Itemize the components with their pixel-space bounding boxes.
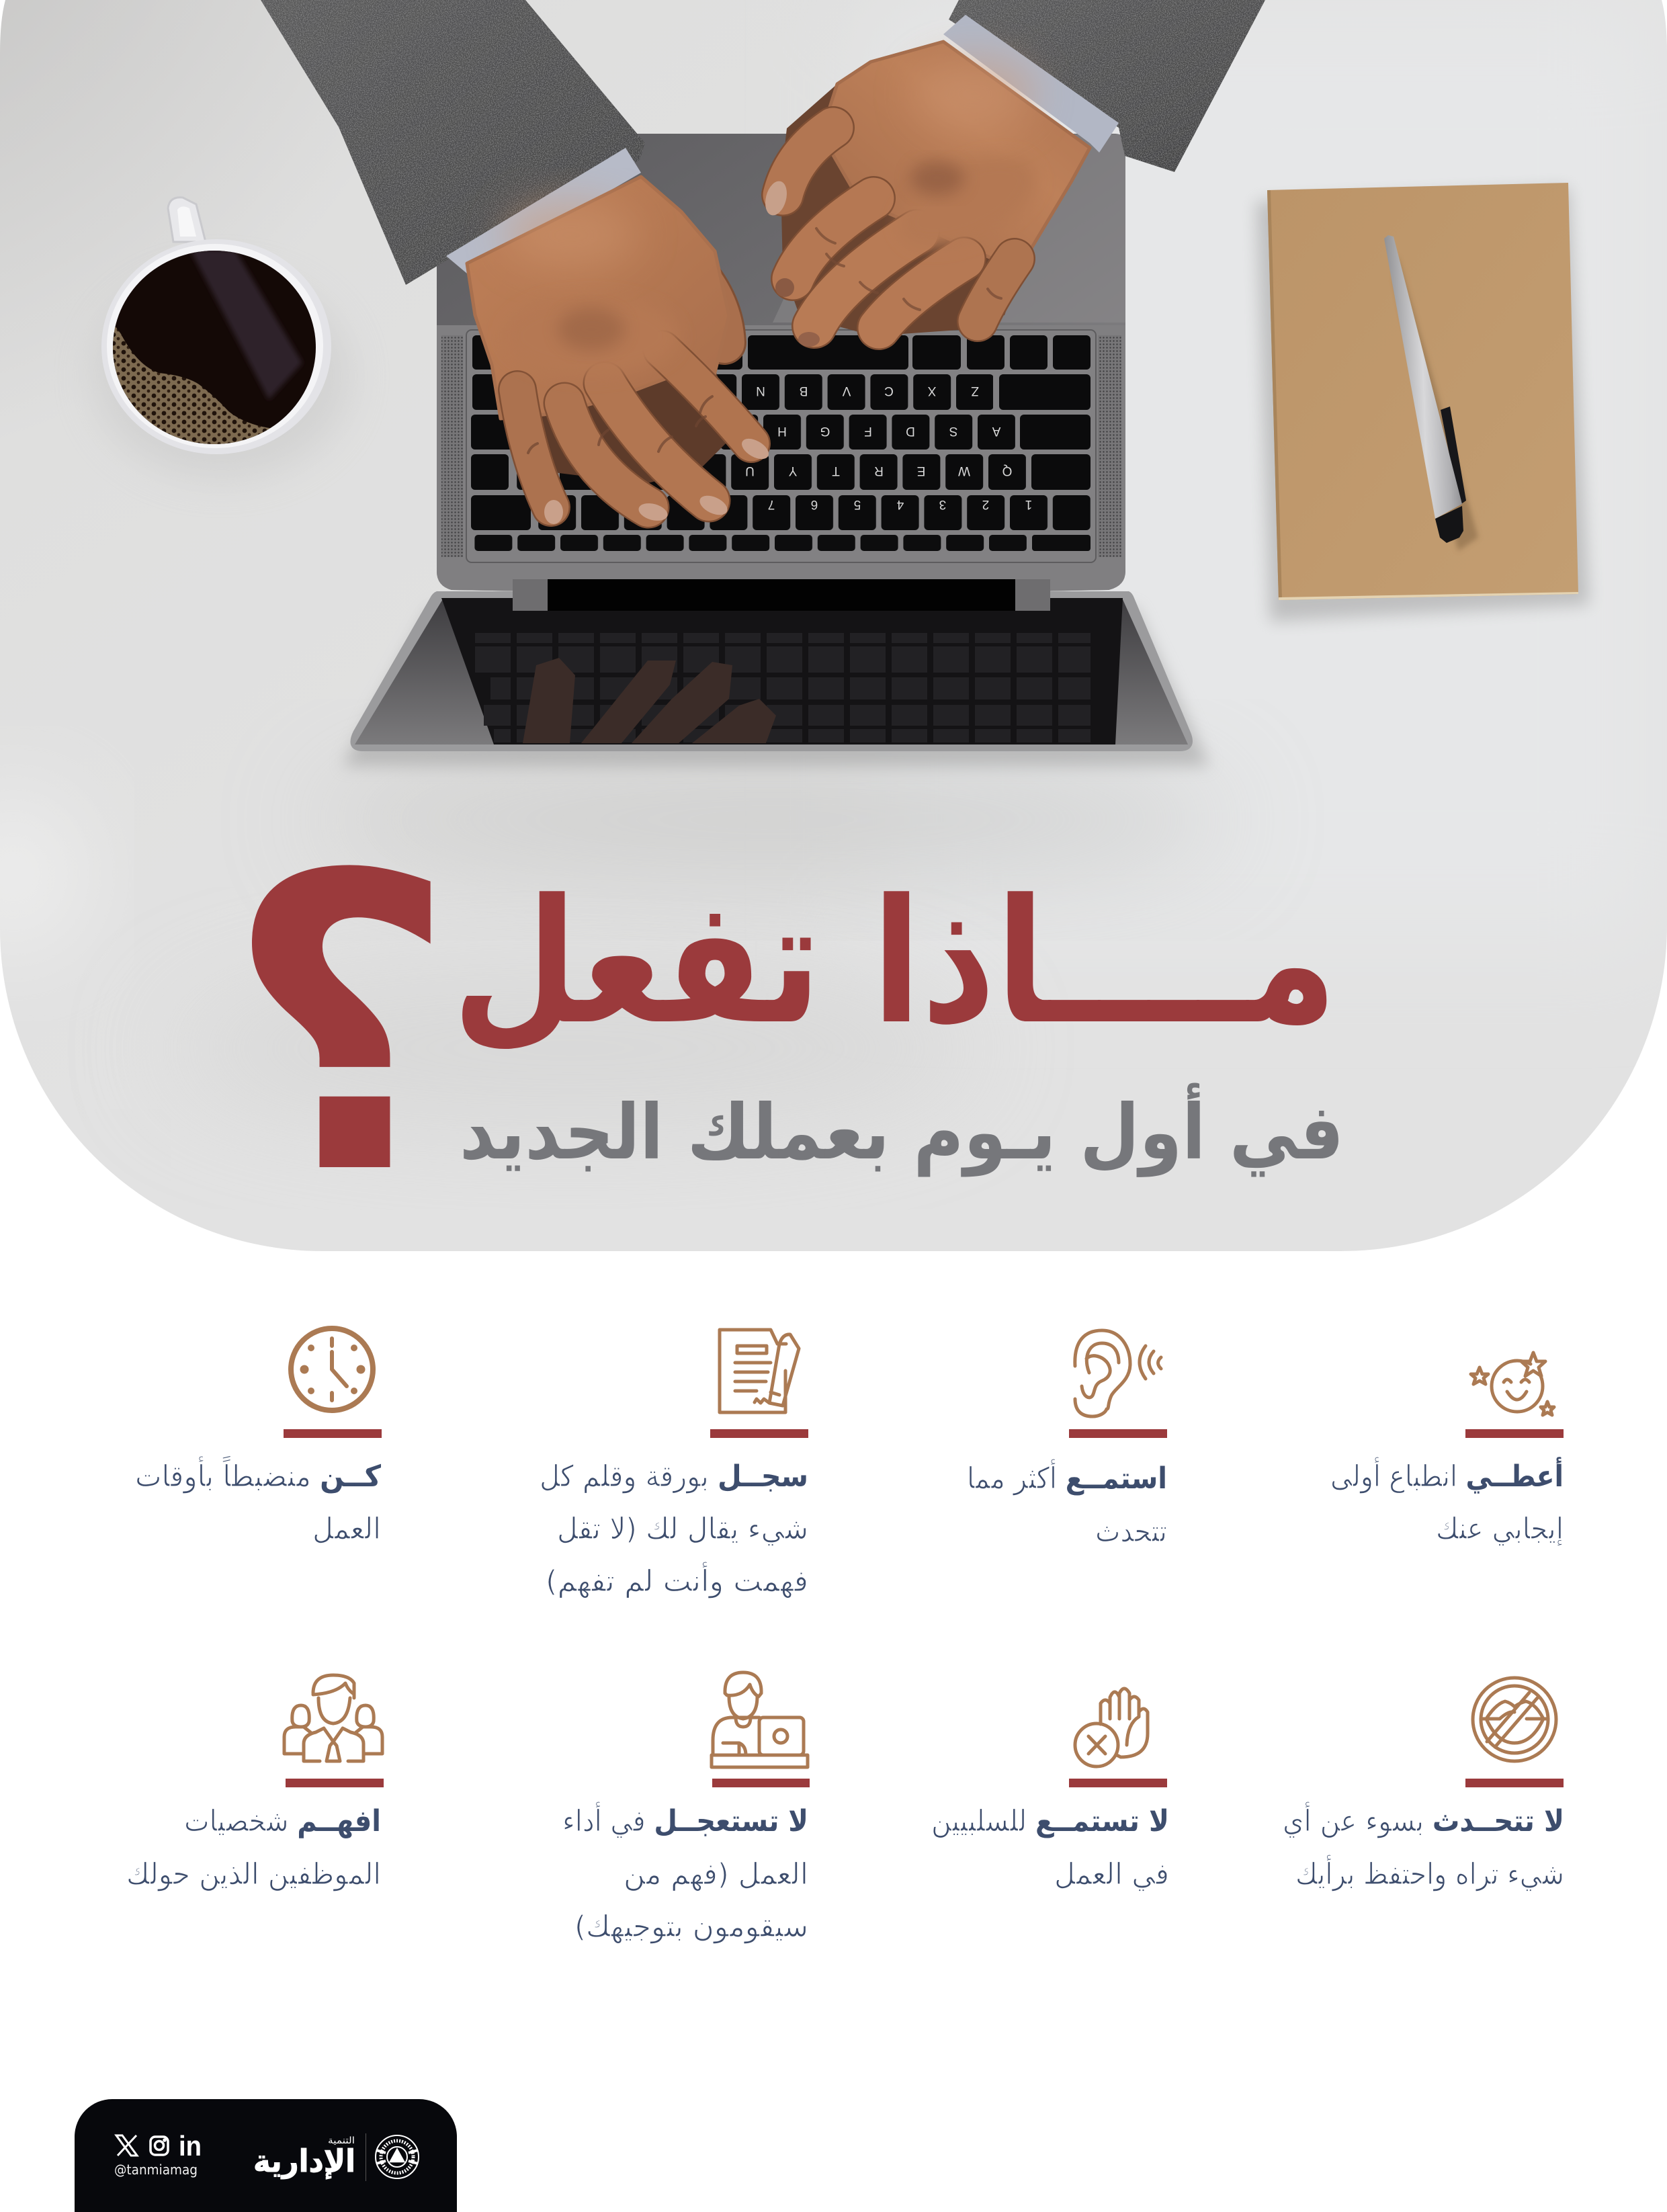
keyboard: V xyxy=(842,384,851,398)
keyboard: D xyxy=(906,424,915,438)
keyboard: Q xyxy=(1002,464,1012,478)
icon: stop hand with x xyxy=(1075,1689,1148,1767)
tip: understand colleagues: الموظفين الذين حولك xyxy=(126,1857,381,1891)
right hand xyxy=(762,42,1090,347)
icon: LinkedIn: in xyxy=(179,2130,202,2162)
keyboard: S xyxy=(949,424,957,438)
icon: Instagram xyxy=(151,2137,168,2155)
tip: do not rush xyxy=(562,1672,810,1944)
tip: first impression: أعطــي انطباع أولى xyxy=(1330,1457,1564,1494)
icon: X xyxy=(116,2135,137,2156)
tip: be punctual: كــن منضبطاً بأوقات xyxy=(135,1455,381,1494)
keyboard xyxy=(466,330,1096,562)
keyboard: W xyxy=(958,464,970,478)
keyboard: G xyxy=(820,424,830,438)
question mark: ؟ xyxy=(224,790,456,1263)
keyboard: C xyxy=(884,384,894,398)
tip: take notes: شيء يقال لك (لا تقل xyxy=(557,1512,808,1546)
footer badge xyxy=(75,2099,457,2212)
tip: do not listen to negative people: في العمل xyxy=(1054,1857,1169,1891)
logo wordmark: التنمية xyxy=(328,2135,355,2146)
keyboard: 1 xyxy=(1025,497,1032,511)
icon: smiling face with stars xyxy=(1471,1353,1554,1415)
icon: person at laptop xyxy=(712,1672,808,1767)
tip: understand colleagues xyxy=(126,1675,384,1891)
tip: understand colleagues: افهــم شخصيات xyxy=(184,1804,381,1838)
keyboard: Z xyxy=(971,384,979,398)
keyboard: X xyxy=(927,384,936,398)
coffee cup xyxy=(94,198,349,477)
keyboard: 4 xyxy=(896,497,904,511)
tip: do not speak badly: لا تتحــدث بسوء عن أي xyxy=(1283,1801,1564,1838)
keyboard: R xyxy=(874,464,884,478)
laptop xyxy=(343,134,1209,766)
left sleeve xyxy=(261,0,645,285)
icon: document and pencil xyxy=(720,1330,799,1412)
tip: listen more: تتحدث xyxy=(1095,1515,1167,1549)
keyboard: 5 xyxy=(854,497,861,511)
hero photo panel xyxy=(0,0,1667,1263)
keyboard: T xyxy=(832,464,840,478)
keyboard: Y xyxy=(788,464,797,478)
keyboard: 7 xyxy=(768,497,775,511)
tip: be punctual: العمل xyxy=(312,1512,381,1546)
tip: take notes: سجــل بورقة وقلم كل xyxy=(540,1459,808,1494)
tip: listen more xyxy=(967,1330,1167,1549)
laptop screen xyxy=(351,591,1193,751)
logo emblem xyxy=(376,2135,419,2178)
laptop hinge xyxy=(513,579,1050,611)
notebook xyxy=(1256,183,1589,622)
handle: @tanmiamag xyxy=(114,2162,198,2178)
subtitle: في أول يـوم بعملك الجديد xyxy=(460,1082,1344,1177)
keyboard: 3 xyxy=(939,497,946,511)
tip: do not speak badly xyxy=(1283,1678,1564,1891)
keyboard: E xyxy=(917,464,925,478)
keyboard: A xyxy=(992,424,1000,438)
tip: take notes xyxy=(540,1330,808,1599)
tip: do not rush: سيقومون بتوجيهك) xyxy=(574,1910,808,1944)
keyboard: U xyxy=(745,464,755,478)
tip: do not rush: العمل (فهم من xyxy=(624,1857,808,1891)
keyboard: H xyxy=(777,424,787,438)
laptop base xyxy=(437,134,1125,591)
tip: do not rush: لا تستعجــل في أداء xyxy=(562,1801,808,1838)
logo wordmark: الإدارية xyxy=(253,2143,355,2179)
tip: do not listen to negative people xyxy=(931,1689,1169,1891)
left cuff xyxy=(446,148,641,273)
tip: do not listen to negative people: لا تستمــع للسلبيين xyxy=(931,1804,1169,1838)
keyboard: N xyxy=(756,384,765,398)
right sleeve xyxy=(949,0,1265,172)
icon: ear xyxy=(1075,1330,1161,1416)
pen xyxy=(1384,235,1478,551)
keyboard: B xyxy=(800,384,808,398)
main title: مــــاذا تفعل xyxy=(452,863,1337,1062)
keyboard: 2 xyxy=(982,497,989,511)
left hand xyxy=(467,177,772,524)
icon: crossed-out lips xyxy=(1473,1678,1556,1761)
keyboard: 6 xyxy=(811,497,818,511)
tip: take notes: فهمت وأنت لم تفهم) xyxy=(546,1562,808,1599)
keyboard: F xyxy=(864,424,872,438)
tip: first impression: إيجابي عنك xyxy=(1436,1512,1564,1546)
icon: clock xyxy=(291,1328,373,1410)
tip: do not speak badly: شيء تراه واحتفظ برأيك xyxy=(1295,1855,1564,1891)
right cuff xyxy=(943,15,1119,153)
tip: first impression xyxy=(1330,1353,1564,1546)
icon: team of people xyxy=(284,1675,382,1761)
tip: be punctual xyxy=(135,1328,382,1546)
tip: listen more: استمــع أكثر مما xyxy=(967,1459,1167,1496)
